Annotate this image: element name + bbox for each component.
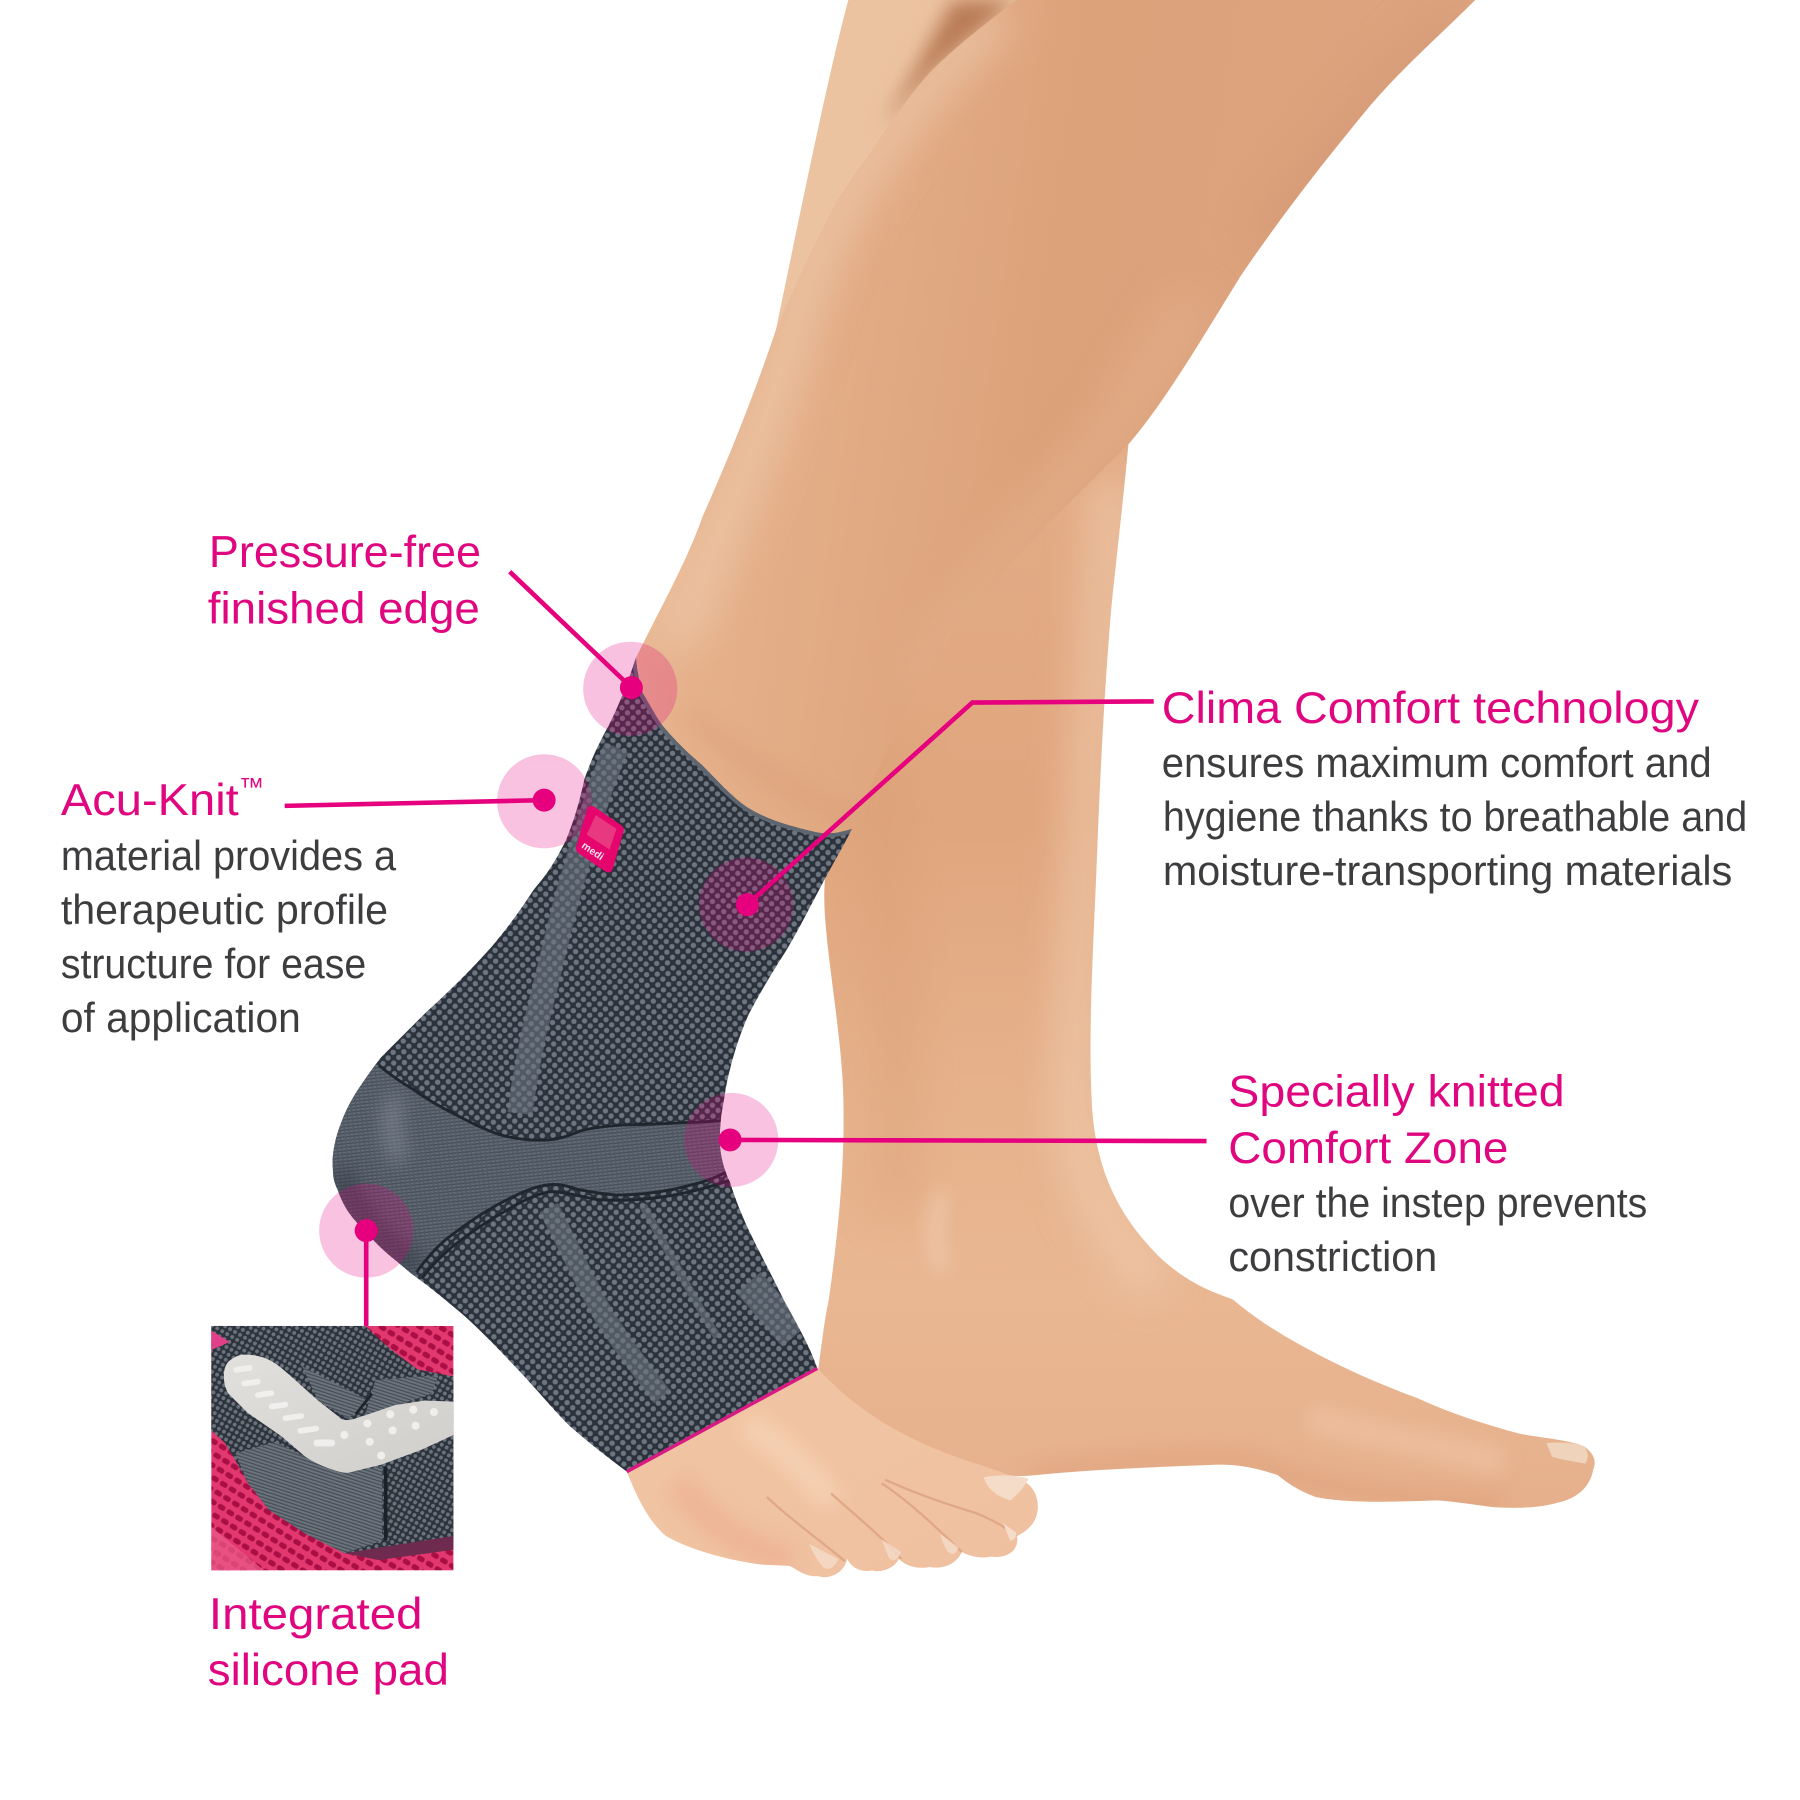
text block: Acu-Knit bbox=[61, 774, 396, 1041]
text block: Specially knitted Comfort Zone bbox=[1228, 1067, 1647, 1280]
callout markers: translucent circles bbox=[319, 642, 793, 1278]
toes bbox=[767, 1480, 1016, 1561]
text block: Clima Comfort technology: moisture-transporting materials bbox=[1163, 848, 1732, 894]
icon: toenails bbox=[809, 1475, 1029, 1569]
silicone pad bbox=[224, 1355, 453, 1473]
text block: Specially knitted Comfort Zone: Comfort Zone bbox=[1228, 1123, 1508, 1173]
text block: Clima Comfort technology: hygiene thanks to breathable and bbox=[1163, 794, 1747, 840]
text block: Clima Comfort technology: Clima Comfort technology bbox=[1162, 683, 1700, 733]
callout: Comfort Zone leader bbox=[719, 1128, 1207, 1151]
front foot bbox=[627, 1368, 1038, 1577]
text block: Specially knitted Comfort Zone: Specially knitted bbox=[1228, 1067, 1565, 1117]
text block: Clima Comfort technology bbox=[1162, 683, 1747, 894]
text block: Acu-Knit: Acu-Knit bbox=[61, 775, 239, 825]
ribs bbox=[520, 747, 794, 1397]
fabric bbox=[211, 1326, 453, 1553]
inset photo: silicone pad bbox=[211, 1326, 453, 1570]
callout: pressure-free edge leader bbox=[510, 572, 643, 699]
text block: Clima Comfort technology: ensures maximum comfort and bbox=[1162, 740, 1712, 786]
callout: Acu-Knit leader bbox=[285, 789, 556, 812]
callout: silicone pad leader bbox=[355, 1219, 378, 1327]
front leg bbox=[636, 0, 1475, 844]
seams bbox=[379, 1065, 730, 1278]
label: Pressure-free finished edge: Pressure-free bbox=[209, 527, 481, 577]
label: Integrated silicone pad: Integrated bbox=[209, 1589, 422, 1639]
text block: Specially knitted Comfort Zone: constriction bbox=[1228, 1234, 1437, 1280]
label: Integrated silicone pad: silicone pad bbox=[208, 1645, 449, 1695]
icon: brand tag bbox=[576, 806, 624, 872]
label: Pressure-free finished edge bbox=[208, 527, 481, 633]
text block: Specially knitted Comfort Zone: over the instep prevents bbox=[1228, 1180, 1647, 1226]
text block: Acu-Knit: therapeutic profile bbox=[61, 887, 388, 933]
label: Pressure-free finished edge: finished edge bbox=[208, 583, 480, 633]
back leg and foot bbox=[818, 444, 1595, 1508]
comfort zone band bbox=[332, 1064, 726, 1276]
text block: Acu-Knit: structure for ease bbox=[61, 941, 366, 987]
ankle brace bbox=[310, 658, 852, 1472]
pink hem bbox=[627, 1368, 817, 1472]
icon: back big toenail bbox=[1546, 1443, 1588, 1464]
text block: Acu-Knit: of application bbox=[61, 995, 301, 1041]
label: Integrated silicone pad bbox=[208, 1589, 449, 1695]
text block: Acu-Knit: ™ bbox=[239, 774, 264, 802]
callout: Clima Comfort leader bbox=[736, 701, 1154, 916]
back thigh bbox=[776, 0, 1016, 330]
icon: brand tag: medi bbox=[579, 841, 605, 863]
text block: Acu-Knit: material provides a bbox=[61, 833, 396, 879]
